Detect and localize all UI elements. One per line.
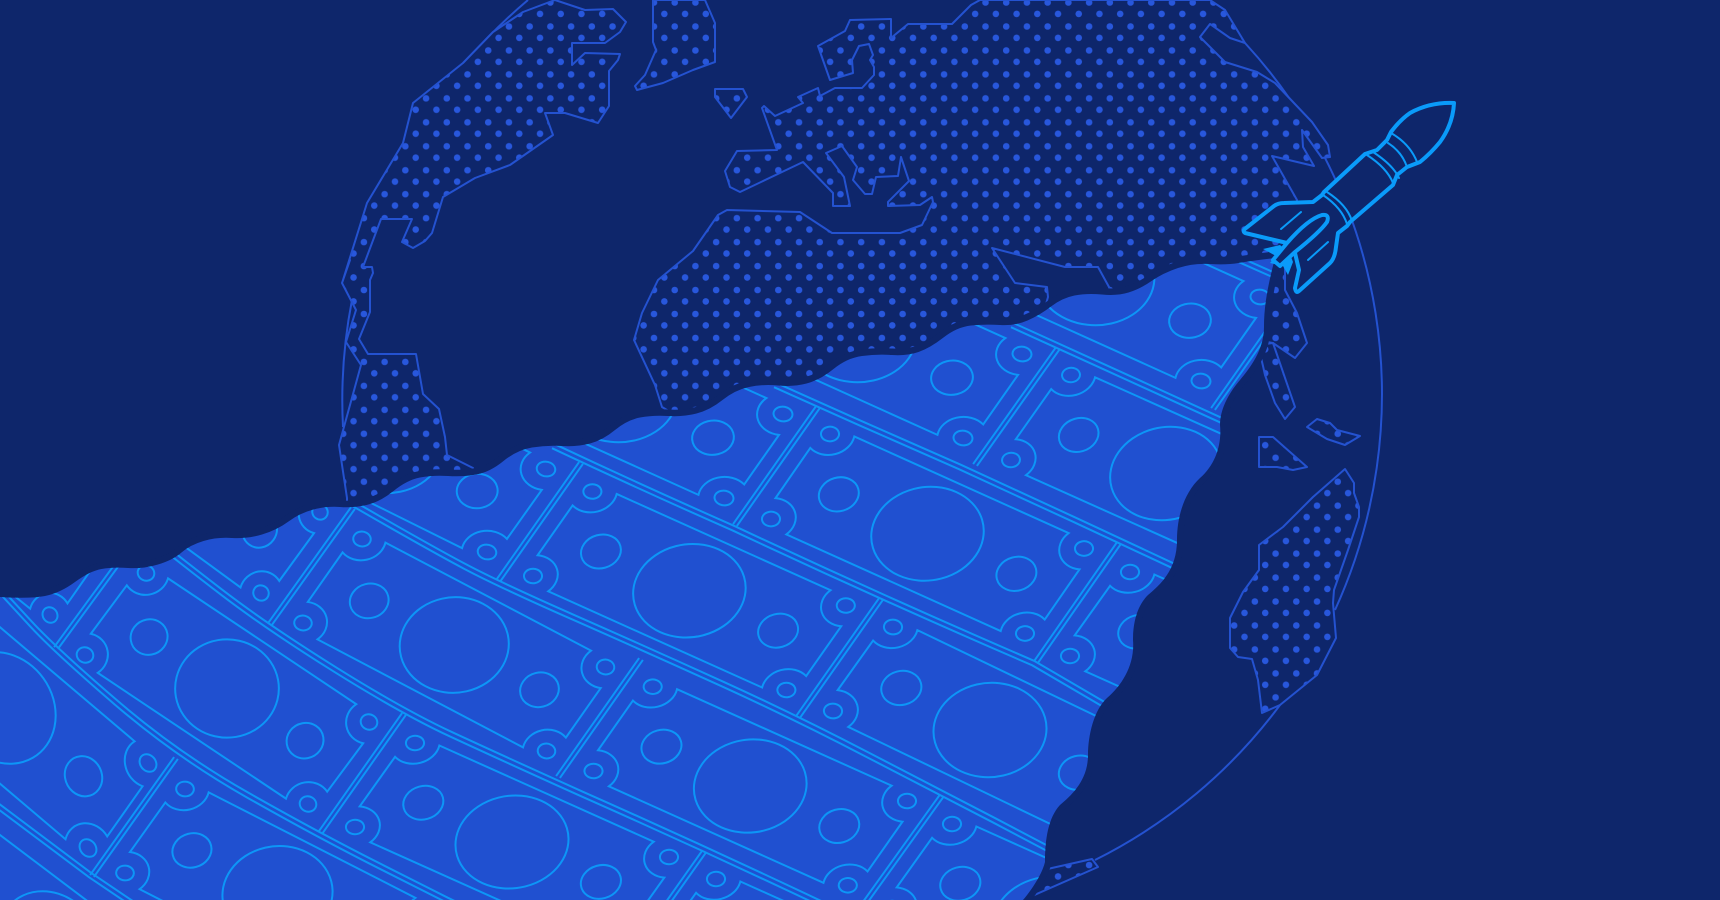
landmass: northern island	[635, 0, 715, 90]
long row separators	[0, 258, 1286, 900]
short column separators	[54, 290, 1298, 900]
globe outline arcs	[342, 0, 1382, 860]
bill faces	[0, 264, 1268, 900]
rocket exhaust flame	[1263, 245, 1293, 275]
dollar bills clipped to the stream	[0, 261, 1272, 900]
landmass: bottom fragment	[1015, 859, 1098, 900]
landmass: peninsula fragment	[1258, 343, 1295, 419]
rocket centre fin	[1273, 215, 1328, 266]
rocket body and fins	[1244, 103, 1454, 292]
money stream	[0, 258, 1274, 900]
landmass: small island	[715, 89, 747, 118]
icon: rocket	[1244, 103, 1454, 292]
dotted continents	[339, 0, 1360, 900]
landmass: north-west continent	[339, 0, 626, 512]
landmass: sliver island	[1307, 419, 1360, 445]
rocket detail lines	[1281, 133, 1417, 260]
money stream halo	[0, 258, 1275, 900]
landmass: small block island	[1259, 437, 1307, 470]
landmass: large eastern island	[1230, 469, 1359, 713]
landmass: Eurasia and Africa	[634, 0, 1330, 430]
